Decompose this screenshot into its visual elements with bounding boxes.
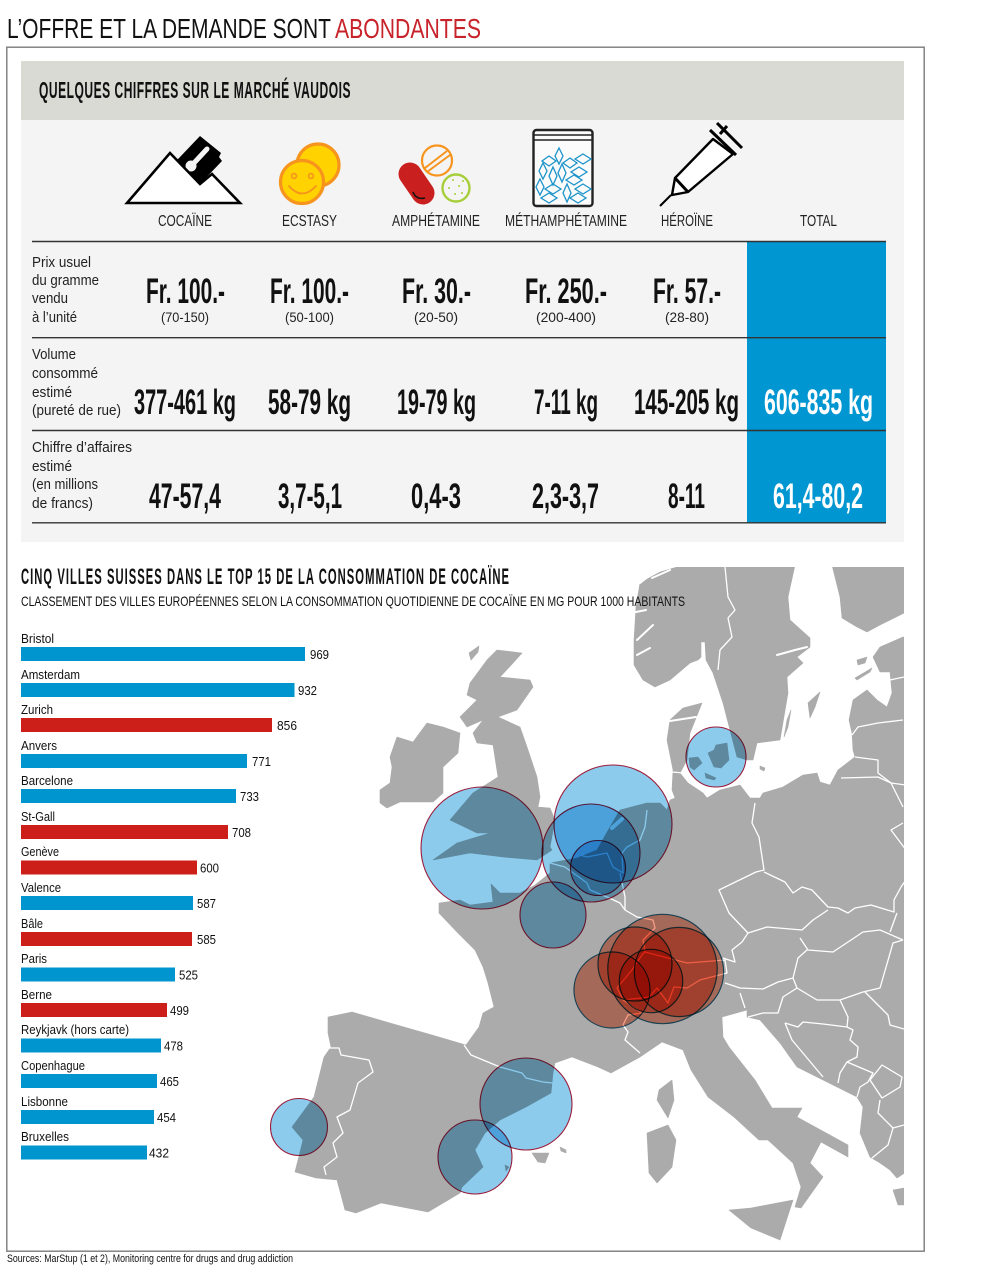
row: price per gram: vendu <box>32 290 68 307</box>
bar: Berne: 499 <box>170 1003 189 1018</box>
row: price per gram: Fr. 100.- <box>146 272 225 311</box>
bar: Genève: Genève <box>21 844 59 859</box>
bar: Bristol <box>21 631 329 662</box>
Great Britain <box>433 650 555 860</box>
row: price per gram <box>32 254 721 326</box>
Ireland <box>380 723 460 808</box>
drug column labels: COCAÏNE <box>158 212 212 230</box>
bar: Anvers <box>21 738 271 769</box>
row: consumed volume: Volume <box>32 346 76 363</box>
bar: Genève: 600 <box>200 860 219 876</box>
bar: Reykjavk <box>21 1022 183 1054</box>
bar: Copenhague <box>21 1058 179 1089</box>
bar: Valence <box>21 880 216 911</box>
sources: Sources: MarStup (1 et 2), Monitoring centre for drugs and drug addiction <box>7 1253 293 1265</box>
drug column labels: MÉTHAMPHÉTAMINE <box>505 211 627 230</box>
drug column labels <box>158 211 837 230</box>
row: consumed volume <box>32 346 873 422</box>
bar: Reykjavk: Reykjavk (hors carte) <box>21 1022 129 1037</box>
row: turnover: 2,3-3,7 <box>532 477 599 516</box>
row: consumed volume: consommé <box>32 365 98 382</box>
bar: Bristol: 969 <box>310 647 329 662</box>
row: turnover: 61,4-80,2 <box>773 477 863 516</box>
bar: Amsterdam: Amsterdam <box>21 667 80 682</box>
Scandinavia <box>634 565 810 760</box>
row: price per gram: (50-100) <box>285 309 334 325</box>
icon: amphetamine <box>410 146 470 202</box>
row: turnover: (en millions <box>32 476 98 493</box>
row: price per gram: (200-400) <box>536 309 596 325</box>
bar: Bruxelles: Bruxelles <box>21 1129 69 1144</box>
row: price per gram: (70-150) <box>161 309 209 325</box>
bar: Valence: Valence <box>21 880 61 895</box>
bar: Anvers: 771 <box>252 754 271 769</box>
row: consumed volume: 145-205 kg <box>634 383 739 422</box>
row: price per gram: Fr. 250.- <box>525 272 607 311</box>
row: turnover: 8-11 <box>668 477 705 516</box>
row: price per gram: du gramme <box>32 272 99 289</box>
row: turnover: 47-57,4 <box>149 477 221 516</box>
bar: Barcelone: Barcelone <box>21 773 73 788</box>
title: ABONDANTES <box>335 13 481 44</box>
Mediterranean islands <box>657 1080 674 1118</box>
title: L’OFFRE ET LA DEMANDE SONT <box>7 13 331 44</box>
bar: Paris: Paris <box>21 951 47 966</box>
row: consumed volume: 58-79 kg <box>268 383 351 422</box>
bar: Bâle: Bâle <box>21 916 43 931</box>
section heading: CINQ VILLES SUISSES DANS LE TOP 15 DE LA CONSOMMATION DE COCAÏNE <box>21 564 510 589</box>
row: turnover: 3,7-5,1 <box>278 477 342 516</box>
bar: Bruxelles: 432 <box>149 1146 169 1160</box>
bar: Amsterdam: 932 <box>298 683 317 698</box>
row: consumed volume: 606-835 kg <box>764 383 873 422</box>
bubbles: Swiss cities <box>574 914 724 1028</box>
row: price per gram: (28-80) <box>665 309 709 325</box>
row: turnover: de francs) <box>32 495 93 512</box>
bar: Amsterdam <box>21 667 317 698</box>
bar: Copenhague: Copenhague <box>21 1058 85 1073</box>
bar: St-Gall: 708 <box>232 825 251 840</box>
drug column labels: ECSTASY <box>282 213 337 230</box>
bar: Bâle <box>21 916 216 947</box>
bar: Copenhague: 465 <box>160 1074 179 1089</box>
row: turnover: estimé <box>32 458 72 475</box>
bar: Anvers: Anvers <box>21 738 57 753</box>
panel heading bar <box>21 61 904 120</box>
bar: Paris: 525 <box>179 968 198 982</box>
land masses <box>292 565 906 1240</box>
bar: Bâle: 585 <box>197 932 216 947</box>
bar: Bristol: Bristol <box>21 631 54 646</box>
total column highlight <box>747 241 886 523</box>
bar: Berne <box>21 987 189 1018</box>
row: price per gram: Prix usuel <box>32 254 91 271</box>
bar: Barcelone <box>21 773 259 804</box>
bar: Lisbonne: 454 <box>157 1110 176 1125</box>
bar chart: cocaine consumption by city <box>21 631 329 1160</box>
bar: St-Gall: St-Gall <box>21 809 55 824</box>
row: turnover <box>32 439 863 516</box>
bar: Genève <box>21 844 219 876</box>
icon: methamphetamine bag <box>534 130 592 206</box>
icon: ecstasy <box>280 144 339 204</box>
row: price per gram: Fr. 57.- <box>653 272 721 311</box>
bar: Zurich: Zurich <box>21 702 53 717</box>
panel: market figures table <box>21 61 904 542</box>
drug column labels: AMPHÉTAMINE <box>392 211 480 230</box>
row: consumed volume: 19-79 kg <box>397 383 476 422</box>
icon: heroin syringe <box>660 123 742 206</box>
Danish islands <box>708 743 729 768</box>
bar: Zurich <box>21 702 297 733</box>
row: consumed volume: estimé <box>32 384 72 401</box>
row: price per gram: Fr. 30.- <box>402 272 471 311</box>
bar: Paris <box>21 951 198 982</box>
row: price per gram: Fr. 100.- <box>270 272 349 311</box>
row: consumed volume: 7-11 kg <box>534 383 598 422</box>
row: consumed volume: 377-461 kg <box>134 383 236 422</box>
bar: St-Gall <box>21 809 251 840</box>
row: consumed volume: (pureté de rue) <box>32 402 121 419</box>
panel heading bar: QUELQUES CHIFFRES SUR LE MARCHÉ VAUDOIS <box>39 76 351 103</box>
icon: cocaine <box>127 136 240 203</box>
Baltic islands <box>808 692 820 718</box>
drug column labels: TOTAL <box>800 213 837 230</box>
row: price per gram: à l’unité <box>32 309 77 326</box>
table rules <box>32 242 886 523</box>
map of Europe <box>270 565 906 1250</box>
bar: Lisbonne <box>21 1094 176 1125</box>
bar: Reykjavk: 478 <box>164 1038 183 1054</box>
bar: Barcelone: 733 <box>240 789 259 804</box>
row: turnover: Chiffre d’affaires <box>32 439 132 456</box>
coast cut-outs: fjords and inlets <box>612 570 807 828</box>
bar: Zurich: 856 <box>277 718 297 733</box>
bubbles: non-Swiss cities <box>270 727 746 1194</box>
country borders <box>324 567 906 1175</box>
bar: Bruxelles <box>21 1129 169 1160</box>
bar: Lisbonne: Lisbonne <box>21 1094 68 1109</box>
bar: Valence: 587 <box>197 896 216 911</box>
section subheading: CLASSEMENT DES VILLES EUROPÉENNES SELON LA CONSOMMATION QUOTIDIENNE DE COCAÏNE EN MG POUR 1000 HABITANTS <box>21 593 685 609</box>
row: price per gram: (20-50) <box>414 309 458 325</box>
row: turnover: 0,4-3 <box>411 477 461 516</box>
bar: Berne: Berne <box>21 987 52 1002</box>
drug column labels: HÉROÏNE <box>661 211 713 230</box>
